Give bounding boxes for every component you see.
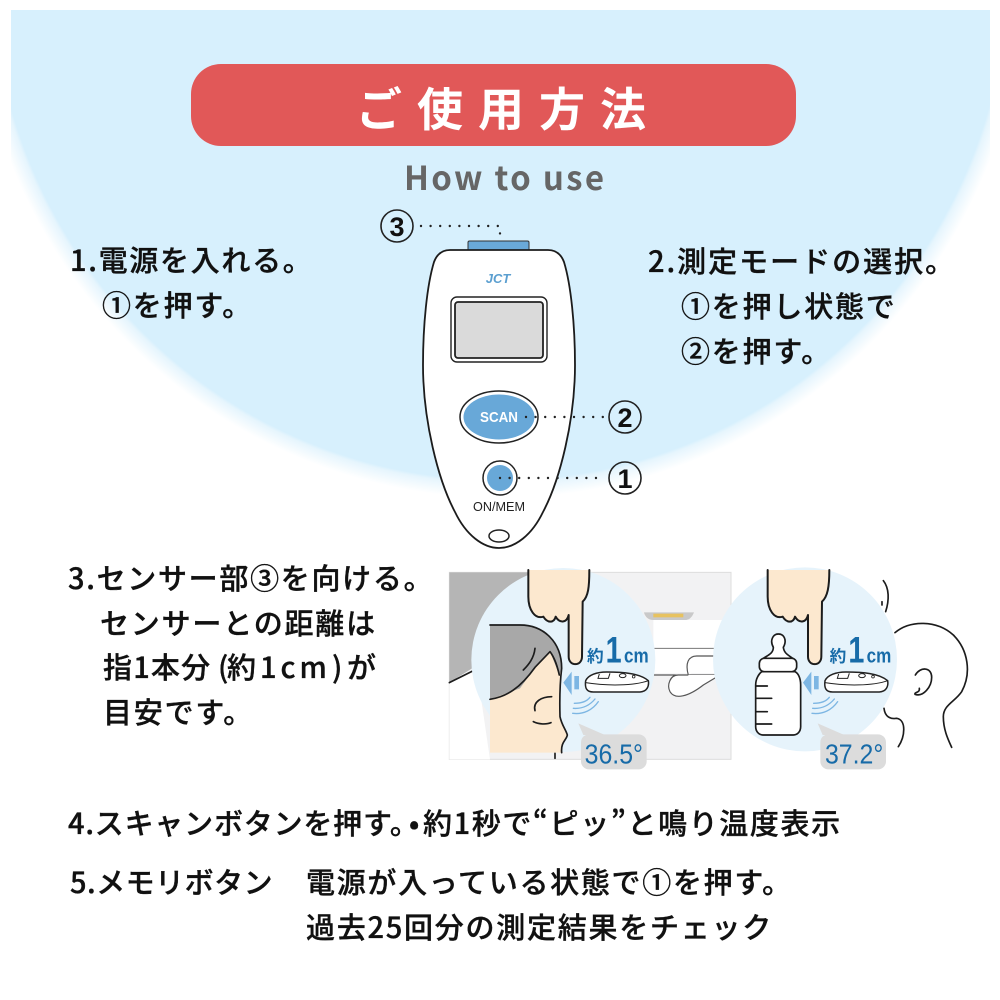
- person profile: [882, 581, 967, 747]
- baby bottle: [756, 634, 801, 735]
- distance label: cm: [624, 645, 649, 668]
- on/mem button: ON/MEM: [473, 500, 525, 514]
- distance label: 約: [830, 643, 846, 667]
- step 2 text: ②を押す。: [681, 329, 832, 371]
- sensor cap: [468, 241, 529, 252]
- circle background: [471, 568, 655, 752]
- temperature bubble: 37.2°: [825, 738, 883, 769]
- title banner: ご使用方法: [356, 74, 661, 140]
- blue arrow: [803, 672, 819, 695]
- step 3 text: 目安です。: [103, 690, 254, 732]
- step 3 text: センサーとの距離は: [100, 601, 377, 643]
- callout 3: [381, 210, 500, 242]
- blue arrow: [563, 672, 579, 695]
- step 4 text: 約1秒で“ピッ”と鳴り温度表示: [423, 801, 842, 843]
- right scene: measuring a bottle: [713, 567, 967, 769]
- scan button: [460, 391, 538, 443]
- step 3 text: 約1cm: [227, 645, 331, 687]
- signal waves: [812, 697, 838, 714]
- distance label: cm: [867, 645, 891, 668]
- distance label: 1: [606, 630, 622, 671]
- on/mem button: [473, 461, 525, 514]
- step 5 text: 5.メモリボタン: [70, 860, 273, 902]
- step 4 text: •: [409, 801, 420, 843]
- step 5 text: 過去25回分の測定結果をチェック: [306, 905, 773, 947]
- display screen: [451, 297, 547, 362]
- mini thermometer: [825, 672, 888, 692]
- subtitle: How to use: [404, 152, 606, 200]
- temperature bubble: [578, 723, 647, 769]
- mini thermometer: [585, 672, 649, 692]
- measurement illustration backdrop: [449, 572, 731, 759]
- step 4 text: 4.スキャンボタンを押す。: [68, 801, 420, 843]
- distance label: 1: [848, 630, 864, 671]
- step 2 text: ①を押し状態で: [681, 284, 897, 326]
- step 5 text: 電源が入っている状態で①を押す。: [306, 860, 793, 902]
- distance label: [830, 630, 891, 671]
- circle background: [713, 567, 897, 751]
- pointing hand: [768, 570, 829, 664]
- step 3 text: 3.センサー部③を向ける。: [68, 556, 434, 598]
- callout 2: 2: [617, 403, 633, 433]
- device body: [423, 250, 575, 548]
- background: pale blue semicircle: [0, 0, 1000, 498]
- step 3 text: (: [218, 645, 230, 687]
- strap hole: [489, 530, 509, 542]
- brand logo: JCT: [486, 271, 511, 286]
- pointing hand: [528, 570, 589, 664]
- step 3 text: [68, 556, 434, 732]
- step 3 text: 指1本分: [103, 645, 211, 687]
- step 1 text: ①を押す。: [102, 283, 253, 325]
- step 2 text: [648, 239, 956, 371]
- step 2 text: 2.測定モードの選択。: [648, 239, 956, 281]
- scan button: SCAN: [480, 409, 518, 426]
- title banner: [191, 64, 796, 146]
- callout 2: [526, 401, 641, 433]
- step 3 text: ): [332, 645, 344, 687]
- distance label: [587, 630, 649, 671]
- temperature bubble: 36.5°: [585, 738, 643, 769]
- step 1 text: 1.電源を入れる。: [70, 238, 313, 280]
- step 3 text: が: [347, 645, 377, 687]
- distance label: 約: [587, 643, 604, 667]
- thermometer diagram: [381, 210, 641, 548]
- signal waves: [573, 697, 598, 714]
- callout 3: 3: [389, 212, 405, 242]
- step 1 text: [70, 238, 313, 325]
- temperature bubble: [818, 723, 886, 769]
- left scene: measuring a forehead: [471, 568, 655, 769]
- head: [490, 625, 567, 758]
- step 5 text: [70, 860, 793, 947]
- callout 1: [500, 462, 641, 494]
- callout 1: 1: [617, 464, 633, 494]
